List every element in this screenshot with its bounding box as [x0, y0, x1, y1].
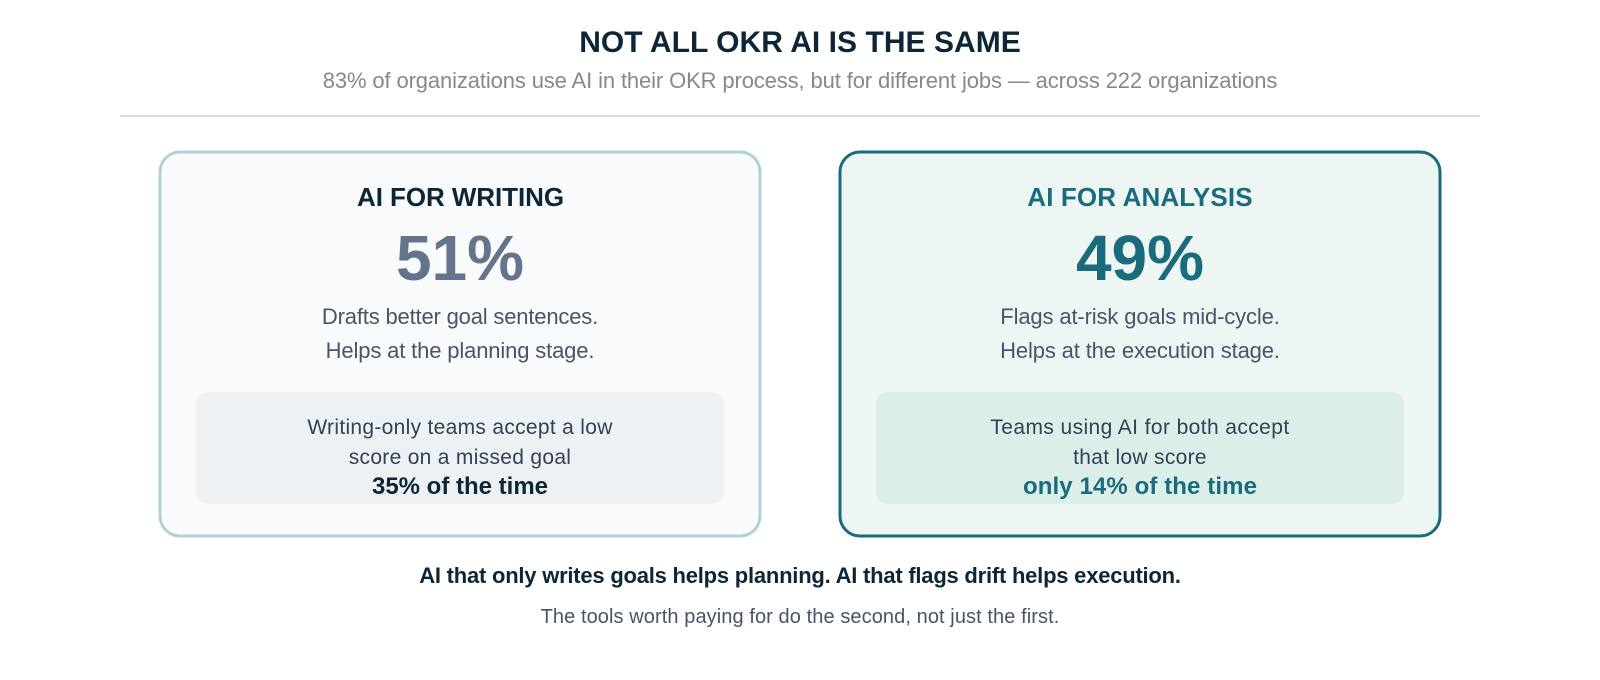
description: writing	[322, 304, 598, 363]
panel background: writing	[160, 152, 760, 536]
description: analysis: Helps at the execution stage.	[1000, 338, 1280, 363]
description: analysis: Flags at-risk goals mid-cycle.	[1000, 304, 1280, 329]
callout text: writing: Writing-only teams accept a low	[307, 416, 613, 439]
stat: 49%: 49%	[1076, 222, 1204, 294]
callout text: writing	[307, 416, 613, 469]
callout text: analysis: that low score	[1073, 446, 1207, 469]
stat: 51%: 51%	[396, 222, 524, 294]
callout background: analysis	[876, 392, 1404, 504]
callout stat: 35%: 35% of the time	[372, 473, 548, 500]
title: NOT ALL OKR AI IS THE SAME	[579, 26, 1021, 59]
panel background: analysis	[840, 152, 1440, 536]
closing note: The tools worth paying for do the second, not just the first.	[541, 606, 1059, 628]
panel: AI for writing	[160, 152, 760, 536]
takeaway: AI that only writes goals helps planning. AI that flags drift helps execution.	[419, 563, 1181, 588]
callout text: analysis: Teams using AI for both accept	[990, 416, 1290, 439]
heading: AI for analysis: AI FOR ANALYSIS	[1027, 182, 1253, 212]
description: writing: Drafts better goal sentences.	[322, 304, 598, 329]
heading: AI for writing: AI FOR WRITING	[357, 182, 564, 212]
callout text: analysis	[990, 416, 1290, 469]
panel: AI for analysis	[840, 152, 1440, 536]
subtitle: 83% of organizations use AI in their OKR process, but for different jobs — across 222 organizations	[323, 68, 1277, 93]
callout background: writing	[196, 392, 724, 504]
description: writing: Helps at the planning stage.	[326, 338, 594, 363]
description: analysis	[1000, 304, 1280, 363]
callout stat: 14%: only 14% of the time	[1023, 473, 1257, 500]
callout text: writing: score on a missed goal	[349, 446, 571, 469]
